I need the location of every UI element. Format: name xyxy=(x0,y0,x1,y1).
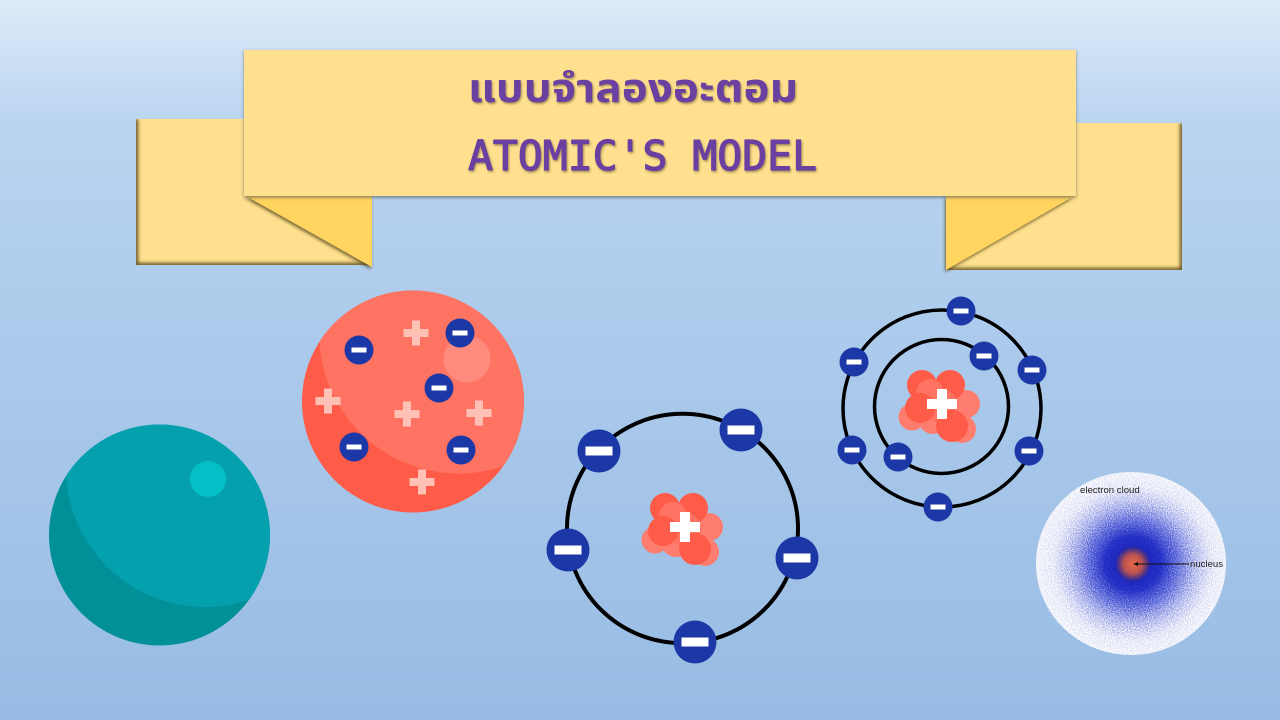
sphere highlight xyxy=(444,336,490,382)
Thomson model: plum pudding sphere xyxy=(302,290,524,512)
title: Thai: แบบจำลองอะตอม xyxy=(468,67,798,111)
title: English: ATOMIC'S MODEL xyxy=(468,132,817,180)
banner: left fold xyxy=(246,196,372,267)
electrons xyxy=(340,318,476,464)
pointer and label: nucleus: nucleus xyxy=(1190,559,1223,570)
Rutherford model: single orbit atom xyxy=(546,408,818,664)
orbit xyxy=(567,414,798,643)
banner: left back ribbon xyxy=(136,119,372,265)
electrons xyxy=(838,296,1046,522)
positive charges xyxy=(316,320,492,494)
banner: right back ribbon xyxy=(946,123,1182,270)
electrons xyxy=(546,408,818,664)
orbits xyxy=(843,310,1041,507)
sphere highlight xyxy=(190,461,226,497)
Bohr model: two orbit atom xyxy=(838,296,1046,522)
electron cloud model xyxy=(1036,472,1226,655)
banner: right fold xyxy=(946,196,1074,270)
label: electron cloud: electron cloud xyxy=(1080,485,1140,496)
nucleus xyxy=(898,370,980,443)
Dalton model: teal sphere xyxy=(49,424,270,646)
banner: main panel xyxy=(244,50,1076,196)
nucleus xyxy=(642,493,723,566)
pointer and label: nucleus xyxy=(1133,559,1223,570)
nucleus glow xyxy=(1114,545,1152,583)
